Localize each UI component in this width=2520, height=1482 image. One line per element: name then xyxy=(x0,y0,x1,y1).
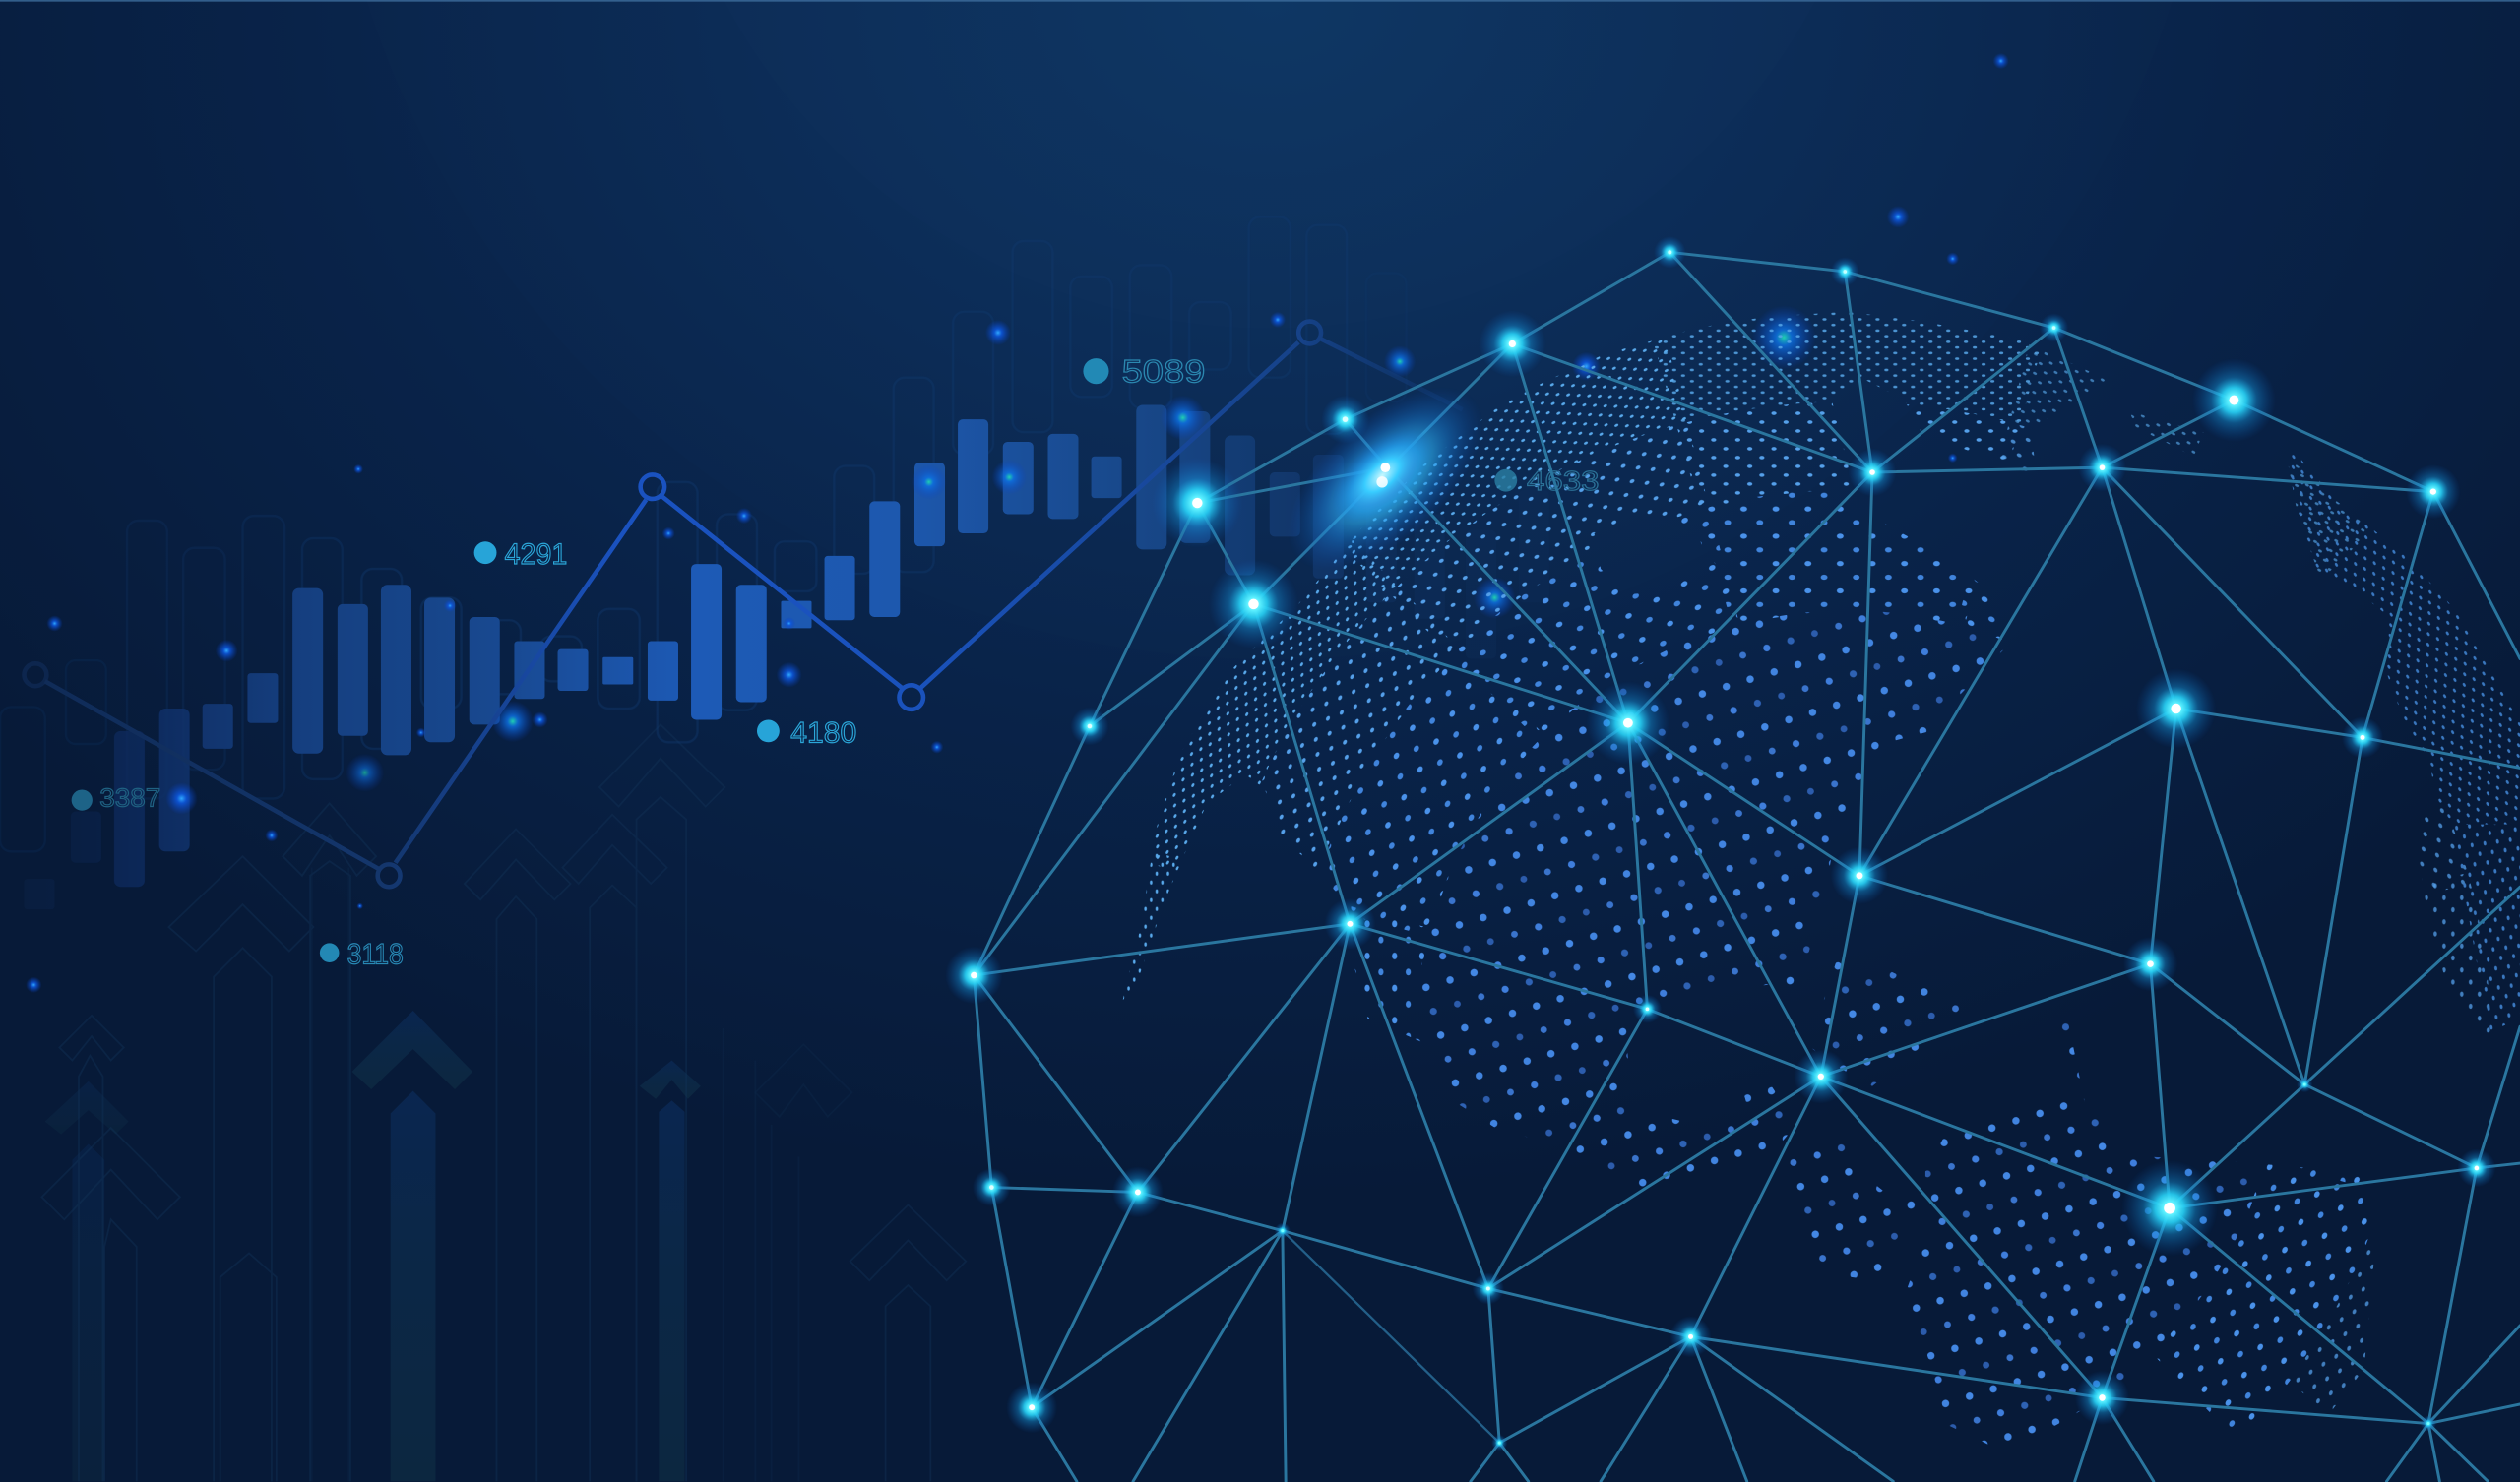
node xyxy=(1324,898,1376,950)
node xyxy=(2457,1148,2496,1188)
node xyxy=(2121,1160,2218,1257)
globe: central dots xyxy=(1415,610,2282,1478)
node xyxy=(2192,358,2276,442)
label 5089 xyxy=(1083,353,1205,390)
chart value labels xyxy=(72,353,1205,971)
node xyxy=(1794,1049,1849,1104)
node xyxy=(1275,1222,1291,1239)
line chart: marker 4 xyxy=(899,685,923,710)
label 4633 xyxy=(1494,465,1599,496)
lens flare xyxy=(1256,354,1515,603)
node xyxy=(945,947,1003,1004)
line chart: marker 2 xyxy=(378,864,401,887)
line chart xyxy=(24,322,1463,887)
candlestick chart: solid bars xyxy=(24,404,1549,909)
node xyxy=(2136,668,2216,749)
label 3118: 3118 xyxy=(347,939,404,971)
node xyxy=(1654,236,1686,269)
label 4633: 4633 xyxy=(1527,465,1599,496)
line chart: marker 3 xyxy=(641,474,664,499)
globe: middle ring dots xyxy=(1233,446,2463,1417)
node xyxy=(2075,1371,2129,1425)
network nodes xyxy=(945,236,2496,1451)
label 4180: 4180 xyxy=(790,716,856,749)
arrow: large solid centre xyxy=(352,1011,472,1481)
line chart: marker 1 xyxy=(24,663,46,686)
arrow: small solid left xyxy=(45,1081,129,1481)
label 4291 xyxy=(474,538,567,571)
network mesh lines xyxy=(974,252,2520,1481)
label 3387: 3387 xyxy=(99,783,160,813)
label 4291: 4291 xyxy=(505,538,567,571)
node xyxy=(1321,396,1369,444)
node xyxy=(1479,310,1546,378)
node xyxy=(2040,313,2068,342)
node xyxy=(1849,449,1897,497)
node xyxy=(2297,1077,2312,1092)
globe: inner ring dots xyxy=(1354,550,2343,1405)
node xyxy=(1491,1435,1507,1451)
label 3387 xyxy=(72,783,160,813)
dotted globe xyxy=(1161,357,2520,1478)
label 5089: 5089 xyxy=(1122,353,1205,390)
node xyxy=(1831,257,1859,286)
node xyxy=(1112,1166,1164,1218)
node xyxy=(1831,846,1888,904)
node xyxy=(1153,458,1242,548)
node xyxy=(2342,716,2383,759)
line chart: marker 5 xyxy=(1298,322,1321,343)
label 3118 xyxy=(320,939,404,971)
arrow: medium solid xyxy=(640,1061,701,1481)
node xyxy=(1070,707,1109,746)
globe: east limb dots lower xyxy=(2452,825,2520,1044)
node xyxy=(1209,559,1298,649)
node xyxy=(1586,681,1670,765)
node xyxy=(1633,995,1662,1023)
outlined arrows xyxy=(41,724,966,1481)
node xyxy=(2406,464,2461,519)
node xyxy=(1006,1382,1057,1433)
node xyxy=(2421,1415,2436,1432)
ghost upward arrows xyxy=(41,724,966,1481)
node xyxy=(1670,1316,1712,1358)
globe: limb ring dots xyxy=(1161,357,2352,1228)
globe: east limb dots upper xyxy=(2287,450,2520,825)
node xyxy=(1473,1272,1504,1305)
node xyxy=(2078,444,2126,492)
node xyxy=(2123,937,2177,991)
node xyxy=(973,1168,1011,1206)
candlestick chart: outlined bars xyxy=(0,216,1407,851)
label 4180 xyxy=(757,716,856,749)
glowing sparks xyxy=(26,53,2009,993)
